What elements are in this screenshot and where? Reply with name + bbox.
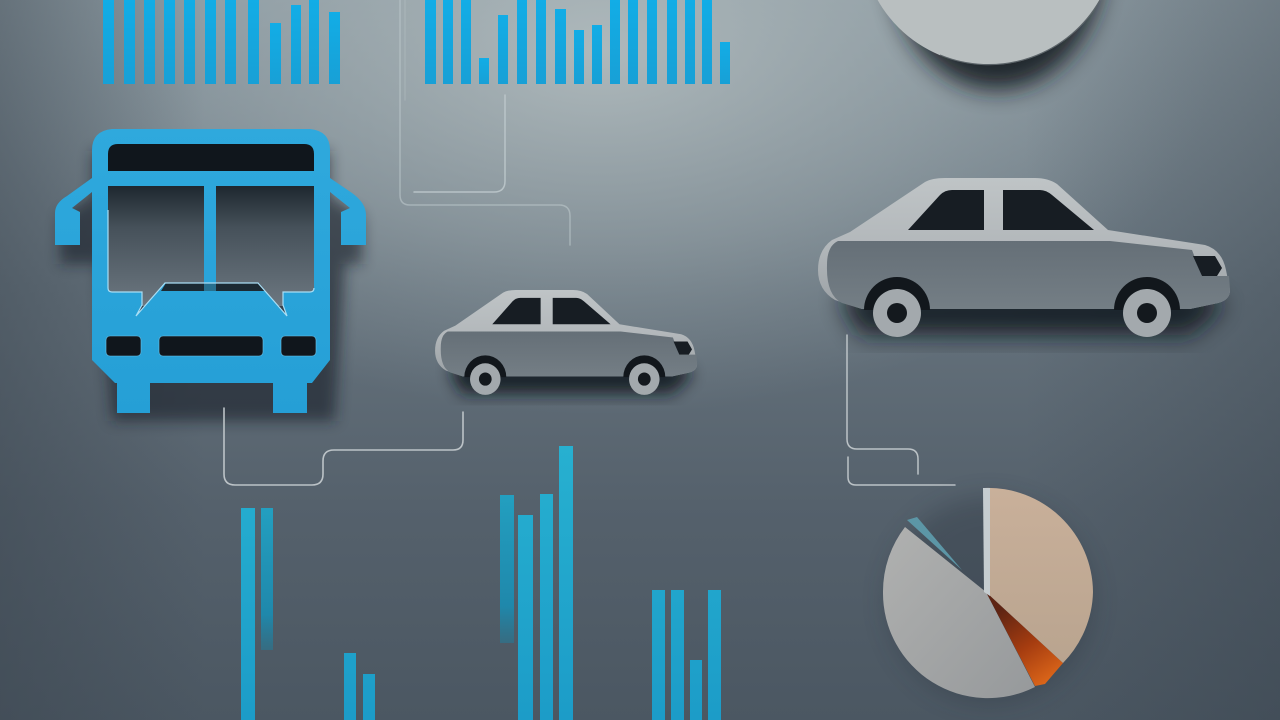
window edge highlight bbox=[108, 210, 314, 316]
bar chart: bottom right bbox=[652, 590, 721, 720]
connector lines: top centre bbox=[400, 0, 570, 245]
connector line: bus to small car bbox=[224, 408, 463, 485]
bar chart: bottom left bbox=[241, 508, 375, 720]
top window strip bbox=[108, 144, 314, 171]
car body panel bbox=[827, 241, 1230, 309]
front wheel bbox=[1114, 277, 1180, 337]
right headlight bbox=[281, 336, 316, 356]
icon: bus bbox=[55, 129, 366, 421]
gray slice bbox=[883, 527, 1035, 698]
grille bbox=[159, 336, 263, 356]
pie chart bbox=[883, 488, 1094, 704]
bar chart: top left bbox=[103, 0, 340, 84]
bar chart: bottom centre bbox=[500, 446, 573, 720]
wiper recess bbox=[161, 283, 265, 291]
front window bbox=[1003, 190, 1094, 230]
pie disc: top right bbox=[861, 0, 1117, 90]
peach edge highlight bbox=[983, 488, 990, 596]
headlight bbox=[1193, 256, 1222, 276]
icon: large car bbox=[818, 178, 1230, 337]
icon: small car bbox=[435, 290, 697, 395]
peach slice bbox=[984, 488, 1093, 663]
rear wheel bbox=[864, 277, 930, 337]
rear window bbox=[908, 190, 984, 230]
orange slice bbox=[986, 592, 1063, 686]
left headlight bbox=[106, 336, 141, 356]
bar chart: top centre bbox=[425, 0, 730, 84]
connector lines: large car to pie bbox=[847, 335, 955, 485]
teal slice bbox=[907, 517, 962, 570]
